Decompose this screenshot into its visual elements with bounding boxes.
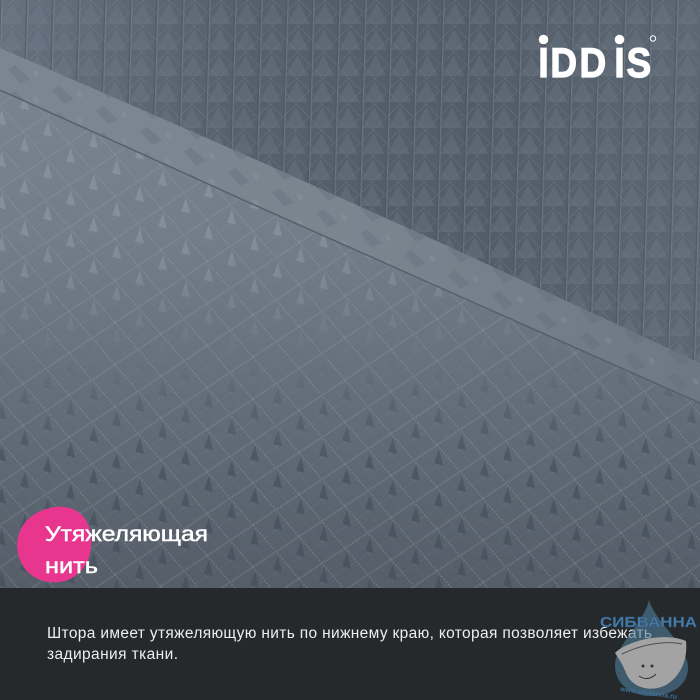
description text: Штора имеет утяжеляющую нить по нижнему краю, которая позволяет избежать <box>47 625 652 642</box>
hem fold band <box>0 48 700 403</box>
watermark: sibvanna bath in droplet <box>600 600 697 700</box>
water drop <box>615 600 688 696</box>
watermark name: СИБВАННА <box>600 614 697 631</box>
description text: задирания ткани. <box>47 646 178 663</box>
heading: Утяжеляющая <box>45 522 208 546</box>
heading: нить <box>45 554 98 578</box>
bottom description panel <box>0 588 700 700</box>
callout: pink blob with heading <box>17 507 214 582</box>
brand logo: IDDIS: IDDIS <box>538 40 651 87</box>
bathtub face <box>639 664 656 679</box>
pink blob <box>17 507 91 582</box>
upper fabric panel <box>0 0 700 363</box>
bathtub <box>615 637 686 689</box>
